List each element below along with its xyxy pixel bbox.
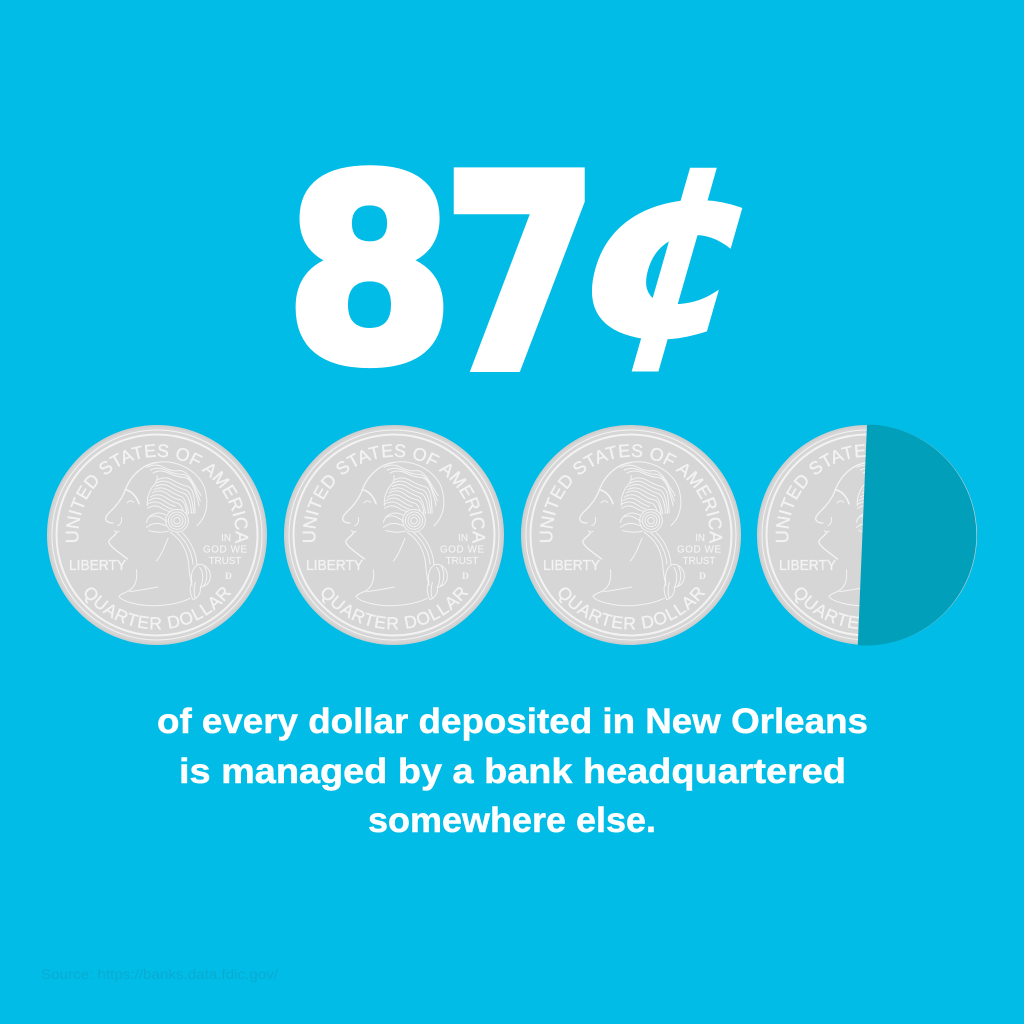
quarter coin 1: GOD WE: [203, 544, 247, 556]
quarter coin 3: UNITED STATES OF AMERICA: [540, 444, 722, 544]
headline: 87 cents: 8: [286, 122, 454, 420]
quarter coin 3: QUARTER DOLLAR: [558, 587, 706, 630]
headline: 87 cents: 7: [443, 121, 598, 431]
quarter coin 1: D: [225, 572, 232, 582]
teal shaded portion of coin: [858, 424, 976, 645]
headline: 87 cents: ¢: [543, 117, 798, 388]
quarter coin 2: [284, 425, 504, 645]
quarter coin 2: QUARTER DOLLAR: [322, 587, 468, 630]
quarter coin 1: TRUST: [209, 556, 241, 567]
quarter coin 3: D: [699, 572, 706, 582]
quarter coin 2: UNITED STATES OF AMERICA: [302, 444, 486, 544]
quarter coin 2: D: [462, 572, 469, 582]
partial quarter coin: QUARTER DOLLAR: [794, 588, 859, 629]
quarter coin 3: IN: [695, 533, 705, 544]
source note: Source: https://banks.data.fdic.gov/: [41, 966, 278, 982]
quarter coin 1: QUARTER DOLLAR: [84, 587, 232, 630]
headline: 87 cents: [286, 117, 798, 431]
quarter coin 2: GOD WE: [440, 544, 484, 556]
partial quarter coin: LIBERTY: [779, 558, 836, 574]
quarter coin 2: IN: [458, 533, 468, 544]
body text: is managed by a bank headquartered: [179, 752, 846, 791]
body text: [157, 702, 868, 840]
quarter coin 3: LIBERTY: [543, 558, 600, 574]
quarter coin 3: GOD WE: [677, 544, 721, 556]
quarter coin 1: [47, 425, 267, 645]
partial quarter coin: UNITED STATES OF AMERICA: [776, 444, 866, 542]
quarter coin 1: IN: [221, 533, 231, 544]
partial quarter coin: [757, 425, 977, 645]
quarter coin 1: LIBERTY: [69, 558, 126, 574]
quarter coin 1: UNITED STATES OF AMERICA: [66, 444, 248, 544]
quarter coin 3: TRUST: [683, 556, 715, 567]
quarter coin 3: [521, 425, 741, 645]
quarter coin 2: TRUST: [446, 556, 478, 567]
quarter coin 4 with teal 87 percent overlay: [757, 424, 977, 646]
quarter coin 2: LIBERTY: [306, 558, 363, 574]
body text: of every dollar deposited in New Orleans: [157, 702, 868, 741]
body text: somewhere else.: [368, 801, 656, 840]
